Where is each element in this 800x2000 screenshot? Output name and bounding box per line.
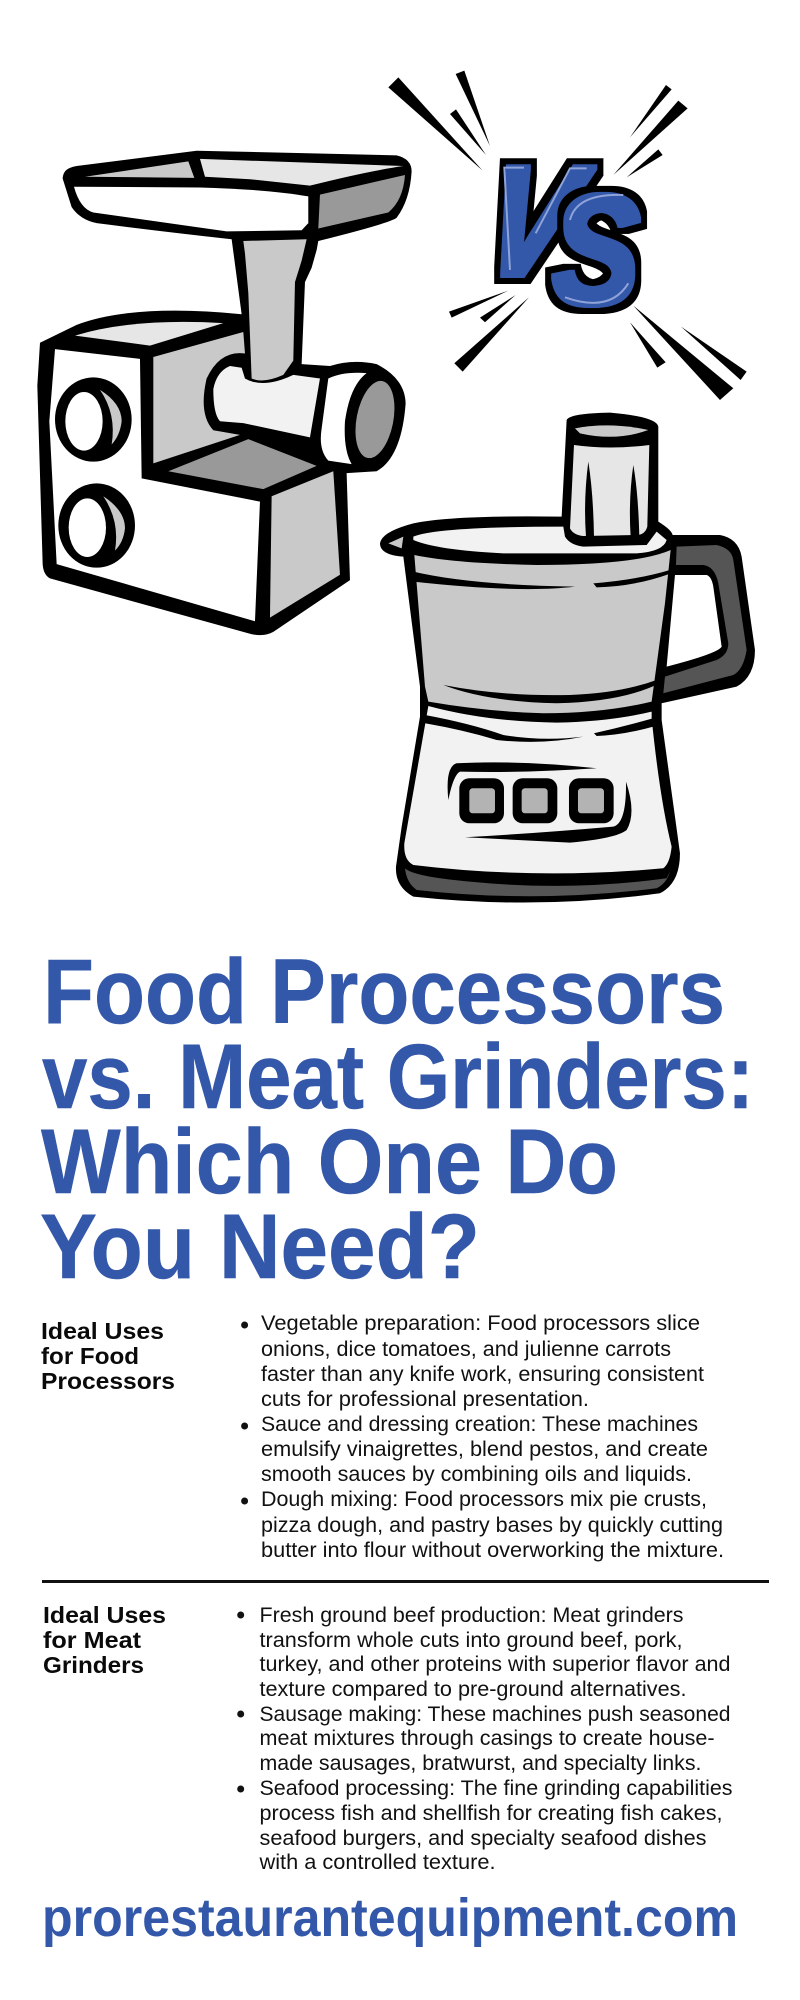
title: Food Processors [43, 941, 725, 1043]
bullet list: food processor uses: cuts for professional presentation. [261, 1388, 589, 1411]
bullet list: meat grinder uses: Sausage making: These machines push seasoned [260, 1703, 730, 1726]
bullet list: food processor uses: Vegetable preparation: Food processors slice [261, 1312, 700, 1335]
bullet list: meat grinder uses: texture compared to pre-ground alternatives. [260, 1678, 686, 1701]
heading: ideal uses for food processors: Ideal Uses [41, 1318, 164, 1344]
bullet list: meat grinder uses: Fresh ground beef production: Meat grinders [260, 1604, 684, 1627]
bullet list: meat grinder uses: process fish and shellfish for creating fish cakes, [260, 1802, 722, 1825]
heading: ideal uses for food processors: for Food [41, 1343, 139, 1369]
bullet list: food processor uses: onions, dice tomatoes, and julienne carrots [261, 1338, 671, 1361]
bullet list: food processor uses: faster than any knife work, ensuring consistent [261, 1363, 704, 1386]
bullet list: food processor uses: butter into flour without overworking the mixture. [261, 1539, 724, 1562]
illustration: meat grinder [37, 151, 412, 635]
bullet list: food processor uses [241, 1312, 724, 1562]
heading: ideal uses for food processors: Processors [41, 1368, 175, 1394]
title: You Need? [40, 1196, 480, 1298]
heading: ideal uses for food processors [41, 1318, 175, 1394]
bullet list: meat grinder uses: with a controlled texture. [258, 1851, 496, 1874]
illustration: food processor [380, 413, 755, 903]
heading: ideal uses for meat grinders: Grinders [43, 1652, 144, 1678]
heading: ideal uses for meat grinders: Ideal Uses [43, 1602, 166, 1628]
illustration: VS lettering: S [552, 162, 640, 338]
bullet list: meat grinder uses [237, 1604, 732, 1874]
bullet list: food processor uses: pizza dough, and pastry bases by quickly cutting [261, 1514, 723, 1537]
bullet list: meat grinder uses: meat mixtures through casings to create house- [260, 1727, 714, 1750]
bullet list: food processor uses: smooth sauces by combining oils and liquids. [261, 1463, 692, 1486]
bullet list: food processor uses: Dough mixing: Food processors mix pie crusts, [261, 1488, 707, 1511]
bullet list: meat grinder uses: transform whole cuts into ground beef, pork, [260, 1629, 682, 1652]
footer website: prorestaurantequipment.com [42, 1888, 738, 1948]
bullet list: food processor uses: emulsify vinaigrettes, blend pestos, and create [261, 1438, 708, 1461]
heading: ideal uses for meat grinders: for Meat [43, 1627, 141, 1653]
title [40, 941, 754, 1298]
bullet list: meat grinder uses: turkey, and other proteins with superior flavor and [260, 1653, 730, 1676]
bullet list: meat grinder uses: made sausages, bratwurst, and specialty links. [260, 1752, 702, 1775]
illustration: VS burst lines [388, 71, 747, 400]
bullet list: meat grinder uses: seafood burgers, and specialty seafood dishes [260, 1827, 706, 1850]
illustration: VS lettering: V [455, 134, 608, 310]
bullet list: meat grinder uses: Seafood processing: The fine grinding capabilities [260, 1777, 732, 1800]
bullet list: food processor uses: Sauce and dressing creation: These machines [261, 1413, 698, 1436]
heading: ideal uses for meat grinders [43, 1602, 166, 1678]
title: Which One Do [41, 1111, 618, 1213]
